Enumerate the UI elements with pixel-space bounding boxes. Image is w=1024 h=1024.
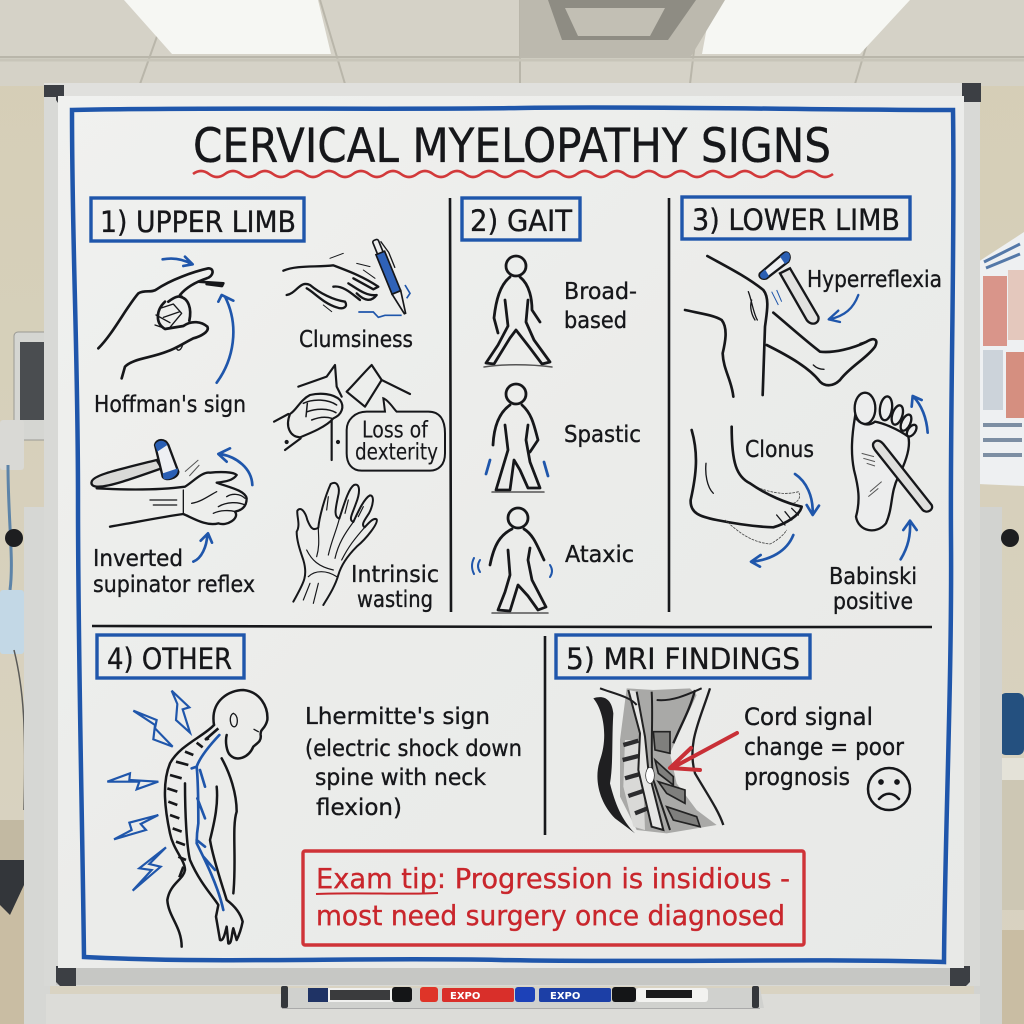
icon: reflex hammer — [91, 440, 199, 487]
text: Lhermitte's sign description: (electric shock down — [305, 736, 522, 762]
lightning bolts — [107, 691, 190, 891]
title: CERVICAL MYELOPATHY SIGNS — [193, 119, 831, 174]
heading: 3 lower limb: 3) LOWER LIMB — [692, 203, 900, 237]
icon: scribble under pen — [358, 285, 410, 317]
callout: loss of dexterity: dexterity — [355, 439, 438, 465]
callout: exam tip: Exam tip: Progression is insidious - — [316, 862, 790, 895]
text: cord signal change: prognosis — [744, 763, 850, 791]
whiteboard stand — [5, 507, 1019, 1024]
text: cord signal change — [744, 703, 904, 791]
arrow: MRI red arrow — [670, 733, 737, 770]
arrow: supinator — [193, 448, 252, 562]
icon: clonus foot — [691, 427, 802, 527]
callout: loss of dexterity: Loss of — [362, 417, 429, 443]
label: Babinski positive: Babinski — [829, 564, 917, 590]
marker: blue: EXPO — [550, 991, 580, 1002]
label: Hoffman's sign: Hoffman's sign — [94, 392, 246, 418]
icon: ataxic gait figure — [472, 508, 552, 613]
icon: spastic gait figure — [486, 384, 548, 492]
label: Broad-based: based — [564, 308, 627, 334]
icon: broad-based gait figure — [484, 256, 552, 367]
icon: knee and leg — [685, 256, 876, 397]
callout: exam tip — [303, 851, 804, 945]
marker: red: EXPO — [450, 991, 480, 1002]
blue nerves — [192, 735, 223, 910]
marker: black — [308, 987, 412, 1002]
whiteboard surface — [58, 96, 964, 968]
arrow: Hoffman flick — [163, 257, 233, 383]
heading: 4 other: 4) OTHER — [107, 642, 232, 676]
text: Lhermitte's sign description: spine with neck — [315, 765, 487, 791]
label: Intrinsic wasting: Intrinsic — [351, 562, 439, 588]
icon: Lhermitte figure — [107, 690, 267, 947]
icon: MRI spine — [593, 688, 723, 833]
dividers — [92, 198, 932, 835]
spine ticks — [167, 728, 218, 877]
icon: clumsy hand — [283, 253, 378, 312]
icon: plantar tool — [873, 441, 932, 512]
text: Lhermitte's sign description — [305, 704, 522, 821]
heading: 1 upper limb: 1) UPPER LIMB — [100, 205, 296, 239]
label: Clonus: Clonus — [745, 437, 814, 463]
label: Intrinsic wasting — [351, 562, 439, 613]
heading: 5 MRI findings: 5) MRI FINDINGS — [566, 642, 800, 676]
label: Clumsiness: Clumsiness — [299, 327, 413, 353]
wall monitor and equipment — [0, 332, 48, 915]
text: Lhermitte's sign description: Lhermitte's sign — [305, 704, 490, 730]
panel: gait figures — [472, 256, 641, 613]
label: Broad-based: Broad- — [564, 279, 637, 305]
label: Intrinsic wasting: wasting — [357, 587, 433, 613]
callout: loss of dexterity — [347, 398, 445, 471]
label: Inverted supinator reflex: Inverted — [93, 546, 183, 572]
label: Inverted supinator reflex: supinator reflex — [93, 572, 255, 598]
label: Hyperreflexia: Hyperreflexia — [807, 267, 942, 293]
panel: lower limb illustrations — [685, 252, 932, 567]
text: cord signal change: change = poor — [744, 733, 904, 761]
blue wavy border — [72, 107, 953, 962]
icon: knee hammer — [760, 252, 819, 324]
marker: second black — [612, 987, 708, 1002]
arrow: toes up — [901, 396, 928, 559]
icon: pen — [371, 237, 412, 315]
icon: Hoffman hand — [98, 268, 223, 378]
icon: wasted hand — [293, 483, 377, 605]
marker: red — [420, 987, 514, 1002]
marker: blue — [515, 987, 611, 1002]
icon: buttoning shirt — [274, 365, 410, 460]
icon: supinator forearm and fist — [97, 472, 247, 527]
wall poster — [978, 232, 1024, 486]
icon: sad face — [868, 768, 910, 810]
icon: plantar foot — [852, 393, 918, 530]
label: Ataxic: Ataxic — [565, 542, 634, 568]
label: Spastic: Spastic — [564, 422, 641, 448]
text: Lhermitte's sign description: flexion) — [316, 795, 402, 821]
arrow: clonus motion — [751, 474, 819, 567]
label: Babinski positive — [829, 564, 917, 615]
label: Inverted supinator reflex — [93, 546, 255, 598]
callout: exam tip: most need surgery once diagnosed — [316, 899, 785, 932]
body outline — [165, 690, 267, 947]
panel: upper limb illustrations — [91, 237, 445, 605]
text: cord signal change: Cord signal — [744, 703, 873, 731]
marker tray — [280, 986, 764, 1009]
label: Broad-based — [564, 279, 637, 334]
heading: 2 gait: 2) GAIT — [470, 204, 572, 238]
exam table — [1000, 693, 1024, 910]
label: Babinski positive: positive — [833, 589, 913, 615]
arrow: hyperreflexia — [829, 295, 858, 322]
icon: clonus dashed foot — [725, 488, 800, 544]
